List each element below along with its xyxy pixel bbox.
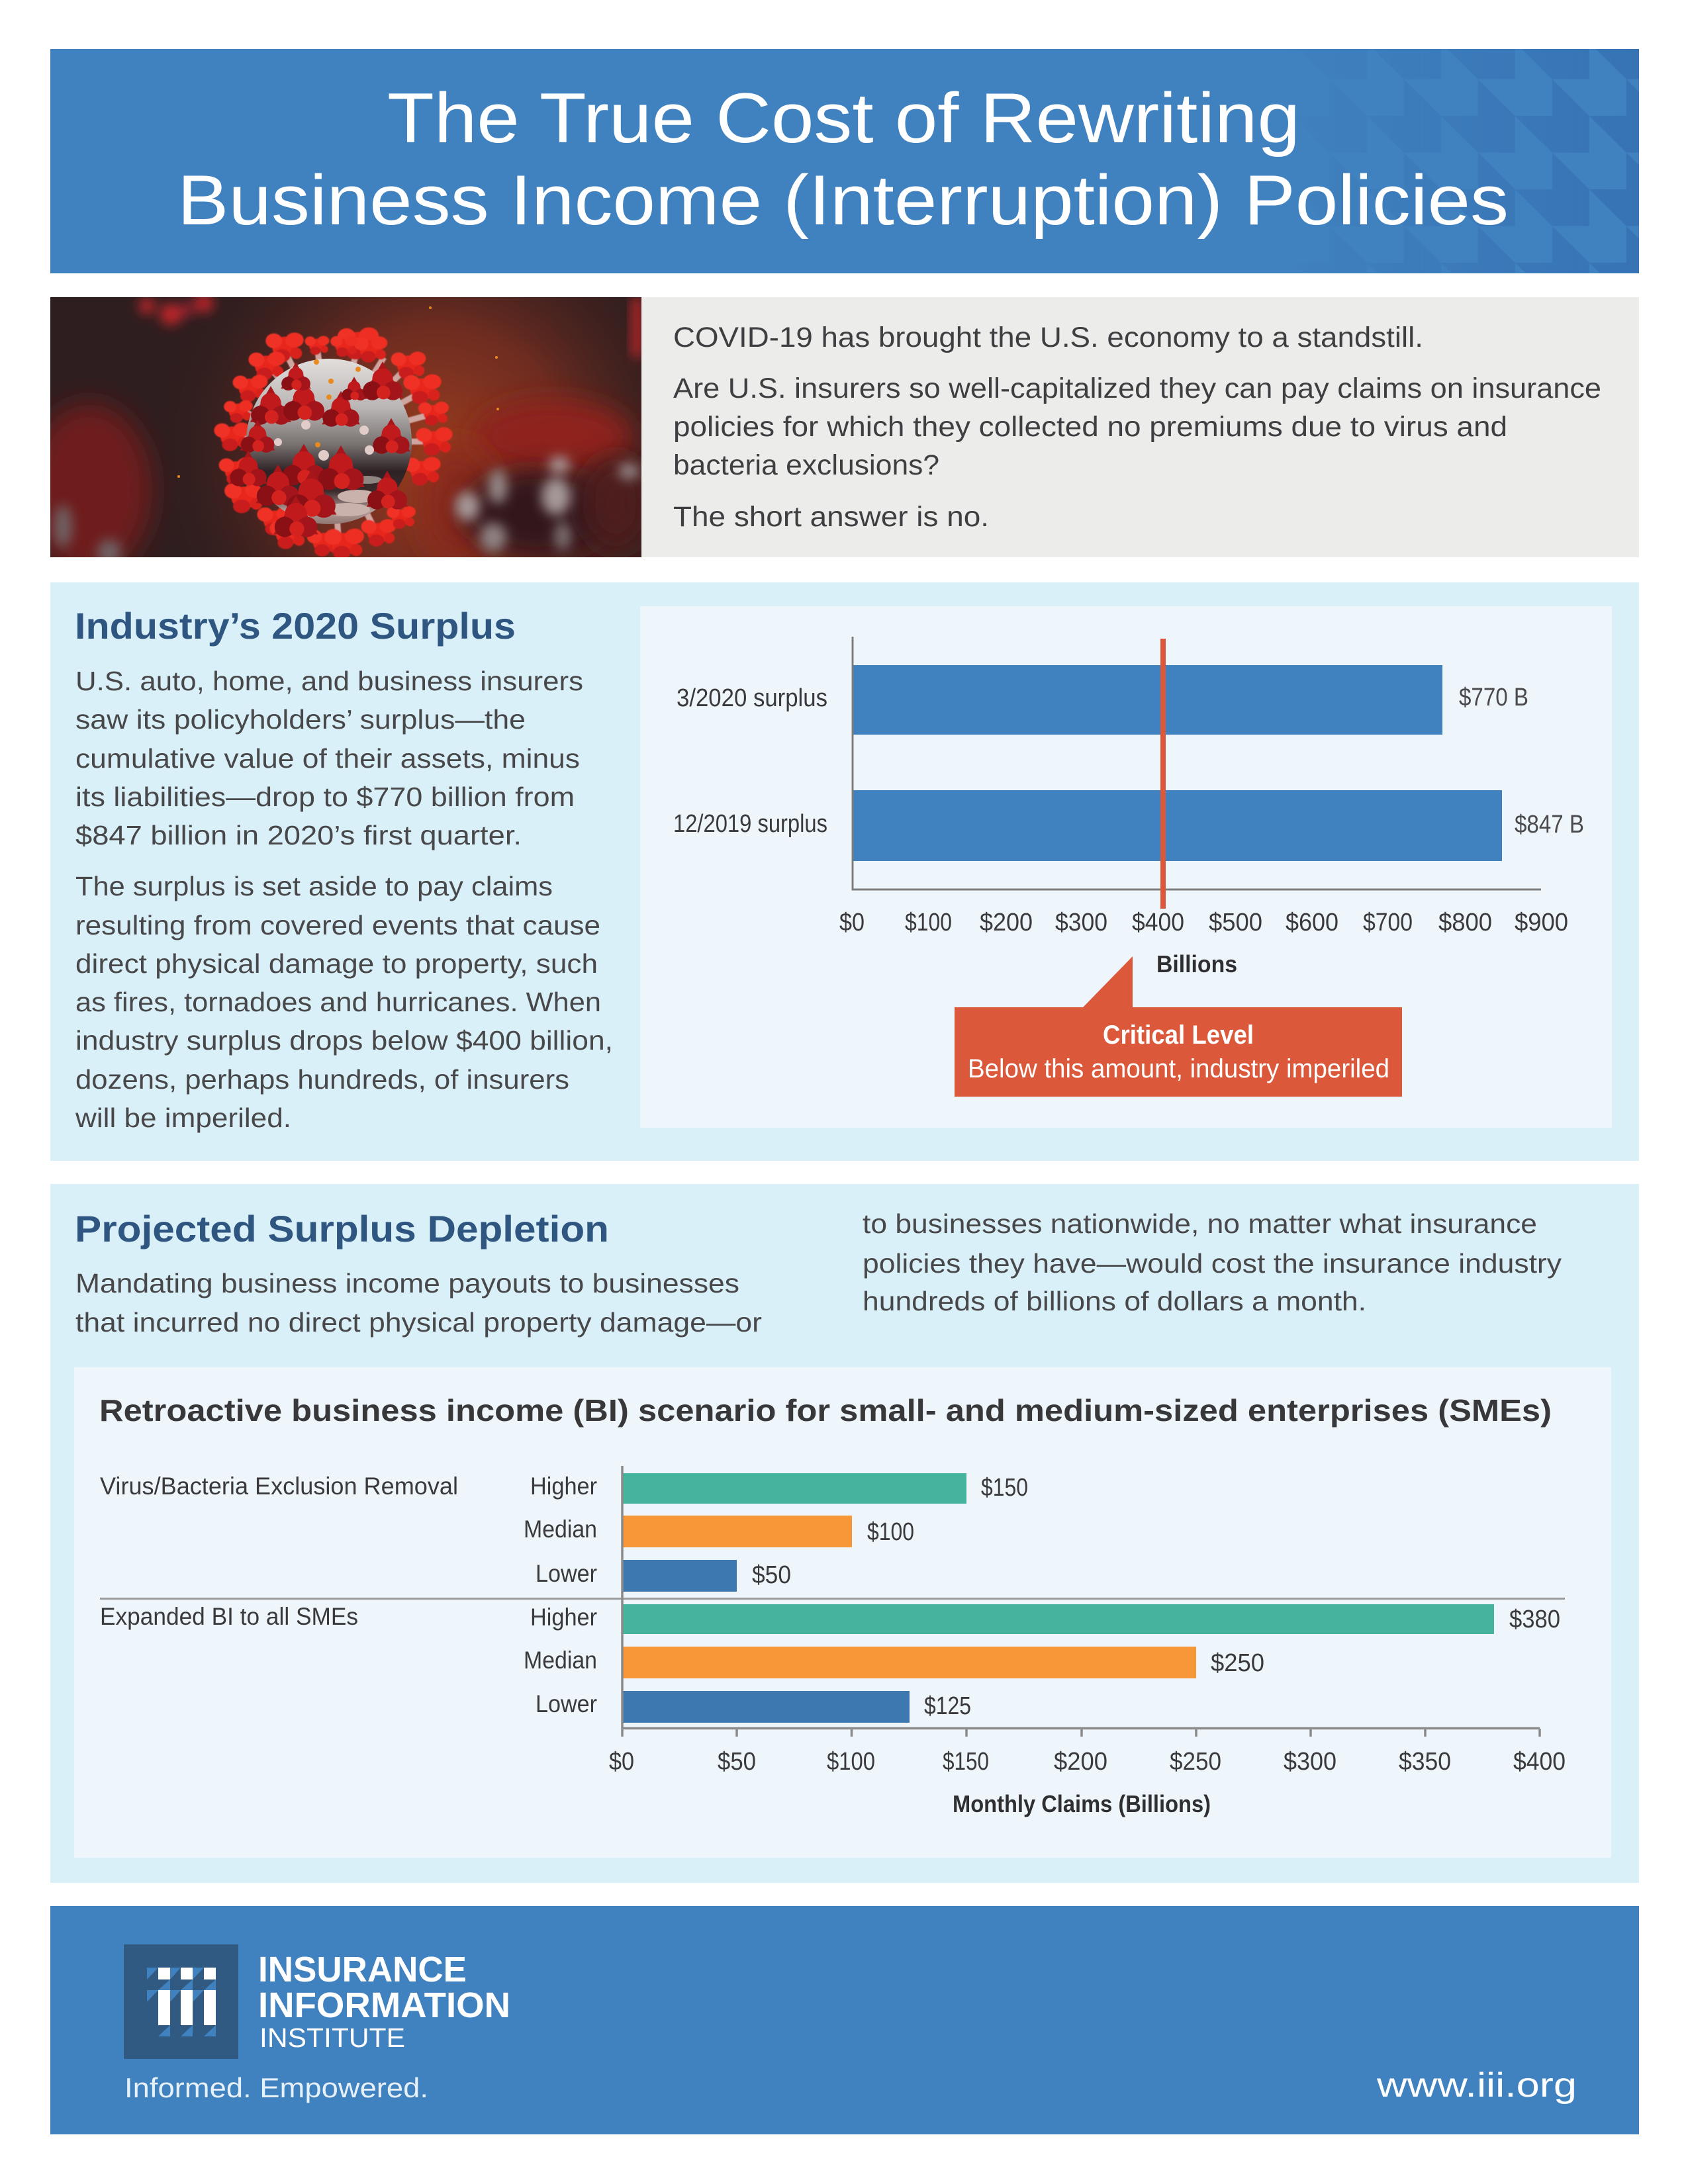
body text column 1: that incurred no direct physical property damage—or (75, 1307, 762, 1338)
bar: 3/2020 surplus (677, 665, 1528, 735)
wordmark: INSTITUTE (259, 2023, 405, 2053)
callout: critical level: Critical Level (1103, 1021, 1254, 1050)
tagline: Informed. Empowered. (124, 2072, 428, 2103)
bar: 12/2019 surplus (673, 790, 1584, 861)
group: virus/bacteria exclusion removal: Virus/Bacteria Exclusion Removal (100, 1473, 458, 1500)
callout: critical level: Below this amount, industry imperiled (968, 1054, 1389, 1083)
body text: as fires, tornadoes and hurricanes. When (75, 987, 601, 1017)
x axis labels (839, 909, 1568, 936)
group: virus/bacteria exclusion removal (100, 1473, 1028, 1592)
panel: scenario chart (74, 1367, 1611, 1858)
intro text: Are U.S. insurers so well-capitalized they can pay claims on insurance (673, 373, 1601, 404)
callout: critical level (955, 956, 1402, 1097)
title: The True Cost of Rewriting (387, 78, 1300, 158)
intro text (673, 322, 1601, 533)
x axis labels: $200 (1054, 1748, 1107, 1776)
x axis labels: $400 (1132, 909, 1184, 936)
title: Business Income (Interruption) Policies (177, 160, 1509, 240)
group: virus/bacteria exclusion removal: Higher (530, 1473, 597, 1500)
group: expanded BI to all SMEs: $380 (1509, 1606, 1560, 1633)
body text: industry surplus drops below $400 billion, (75, 1025, 613, 1056)
image: coronavirus particle (50, 297, 641, 557)
group: virus/bacteria exclusion removal: $150 (981, 1474, 1028, 1502)
group: virus/bacteria exclusion removal: Lower (536, 1560, 597, 1587)
group: expanded BI to all SMEs (100, 1603, 1560, 1723)
x axis labels: $300 (1284, 1748, 1336, 1776)
body text: dozens, perhaps hundreds, of insurers (75, 1064, 569, 1095)
body text (75, 666, 613, 1133)
x axis labels: $600 (1286, 909, 1338, 936)
heading: Industry’s 2020 Surplus (75, 605, 516, 647)
wordmark: INFORMATION (258, 1985, 510, 2025)
bar: 12/2019 surplus: $847 B (1515, 811, 1584, 839)
intro text: bacteria exclusions? (673, 449, 939, 481)
wordmark (258, 1950, 510, 2053)
website: www.iii.org (1376, 2066, 1577, 2105)
logo (124, 1944, 510, 2059)
group: expanded BI to all SMEs: Lower (536, 1690, 597, 1717)
body text column 2: policies they have—would cost the insurance industry (863, 1248, 1562, 1279)
bar: 3/2020 surplus: 3/2020 surplus (677, 684, 827, 712)
bar: 12/2019 surplus: 12/2019 surplus (673, 810, 827, 838)
panel: surplus chart (640, 606, 1612, 1128)
body text: saw its policyholders’ surplus—the (75, 704, 526, 735)
x axis labels: $250 (1170, 1748, 1221, 1776)
panel: intro (641, 297, 1639, 557)
x axis labels: $0 (609, 1748, 634, 1776)
body text: cumulative value of their assets, minus (75, 743, 580, 774)
intro text: policies for which they collected no premiums due to virus and (673, 411, 1507, 443)
body text: resulting from covered events that cause (75, 910, 600, 940)
group: expanded BI to all SMEs: Higher (530, 1604, 597, 1631)
x axis labels: $50 (718, 1748, 756, 1776)
x axis labels: $500 (1209, 909, 1262, 936)
virus spikes (214, 328, 453, 559)
body text column 1: Mandating business income payouts to businesses (75, 1268, 739, 1298)
icon: III mark (124, 1944, 238, 2059)
body text: its liabilities—drop to $770 billion from (75, 782, 575, 812)
x axis labels: $700 (1363, 909, 1413, 936)
chart title: Retroactive business income (BI) scenario for small- and medium-sized enterprises (SMEs) (99, 1393, 1552, 1428)
body text: will be imperiled. (75, 1103, 291, 1133)
x axis labels: $0 (839, 909, 865, 936)
critical level line (1160, 639, 1166, 909)
title banner (50, 49, 1639, 273)
x axis labels: $400 (1513, 1748, 1566, 1776)
group: virus/bacteria exclusion removal: $100 (867, 1518, 914, 1546)
body text column 2: hundreds of billions of dollars a month. (863, 1286, 1366, 1316)
body text: U.S. auto, home, and business insurers (75, 666, 583, 696)
x axis labels: $150 (943, 1748, 989, 1776)
bar: 3/2020 surplus: $770 B (1459, 684, 1528, 711)
panel: industry surplus (50, 582, 1639, 1161)
group: expanded BI to all SMEs: $125 (924, 1692, 971, 1720)
x axis labels (609, 1748, 1566, 1776)
virus surface proteins (229, 361, 410, 537)
body text column 1 (75, 1268, 762, 1338)
group: expanded BI to all SMEs: $250 (1211, 1649, 1264, 1677)
footer (50, 1906, 1639, 2134)
heading: Projected Surplus Depletion (75, 1208, 609, 1250)
virus body (246, 359, 412, 524)
intro text: The short answer is no. (673, 501, 989, 533)
axis title: Monthly Claims (Billions) (953, 1790, 1211, 1817)
body text column 2: to businesses nationwide, no matter what insurance (863, 1208, 1537, 1239)
x axis labels: $900 (1515, 909, 1568, 936)
axis title: Billions (1156, 950, 1237, 978)
title (177, 78, 1509, 240)
group: expanded BI to all SMEs: Median (524, 1647, 597, 1674)
body text: The surplus is set aside to pay claims (75, 871, 553, 901)
body text column 2 (863, 1208, 1562, 1316)
x axis labels: $800 (1438, 909, 1492, 936)
x axis labels: $300 (1055, 909, 1107, 936)
wordmark: INSURANCE (258, 1950, 467, 1989)
body text: $847 billion in 2020’s first quarter. (75, 820, 522, 850)
x axis labels: $100 (905, 909, 952, 936)
x axis labels: $100 (827, 1748, 875, 1776)
group: expanded BI to all SMEs: Expanded BI to all SMEs (100, 1603, 358, 1630)
body text: direct physical damage to property, such (75, 948, 598, 979)
x axis labels: $350 (1399, 1748, 1451, 1776)
intro text: COVID-19 has brought the U.S. economy to a standstill. (673, 322, 1423, 353)
group: virus/bacteria exclusion removal: $50 (752, 1561, 791, 1589)
x axis labels: $200 (980, 909, 1033, 936)
panel: projected surplus depletion (50, 1184, 1639, 1883)
group: virus/bacteria exclusion removal: Median (524, 1516, 597, 1543)
